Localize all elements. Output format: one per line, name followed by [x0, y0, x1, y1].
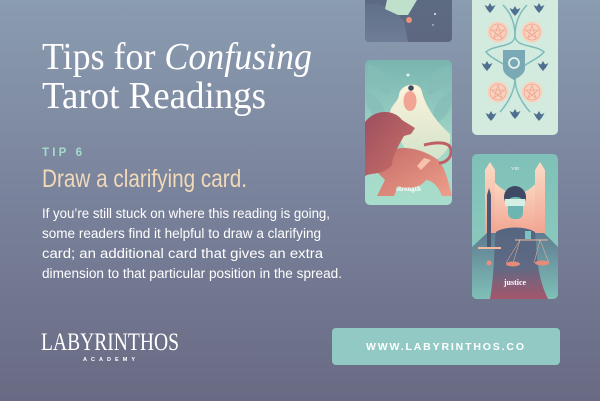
logo: Labyrinthos Academy	[41, 329, 179, 363]
tip number label: TIP 6	[42, 147, 82, 159]
title: Tarot Readings	[42, 75, 266, 117]
tarot card: ace of pentacles	[472, 0, 558, 135]
tarot card: justice: justice	[503, 278, 527, 287]
woman	[390, 85, 450, 165]
tarot card: top partial	[365, 0, 452, 42]
body text: dimension to that particular position in the spread.	[42, 266, 342, 281]
tip heading: Draw a clarifying card.	[42, 165, 247, 193]
body text: If you’re still stuck on where this reading is going,	[42, 206, 330, 221]
tarot card: strength	[365, 60, 452, 205]
logo: Labyrinthos Academy: ACADEMY	[83, 357, 135, 363]
leaves	[369, 108, 449, 122]
body text	[42, 206, 342, 281]
website button: WWW.LABYRINTHOS.CO	[366, 341, 524, 353]
website button	[332, 328, 560, 365]
body text: some readers find it helpful to draw a clarifying	[42, 226, 321, 241]
lion	[375, 148, 452, 196]
body text: card; an additional card that gives an extra	[42, 246, 324, 261]
tarot card: justice	[472, 154, 558, 299]
tarot card: justice: VIII	[511, 166, 519, 171]
title	[42, 36, 312, 117]
title: Tips for Confusing	[42, 36, 312, 78]
tarot card: strength: strength	[396, 185, 421, 193]
logo: Labyrinthos Academy: LABYRINTHOS	[41, 329, 179, 356]
